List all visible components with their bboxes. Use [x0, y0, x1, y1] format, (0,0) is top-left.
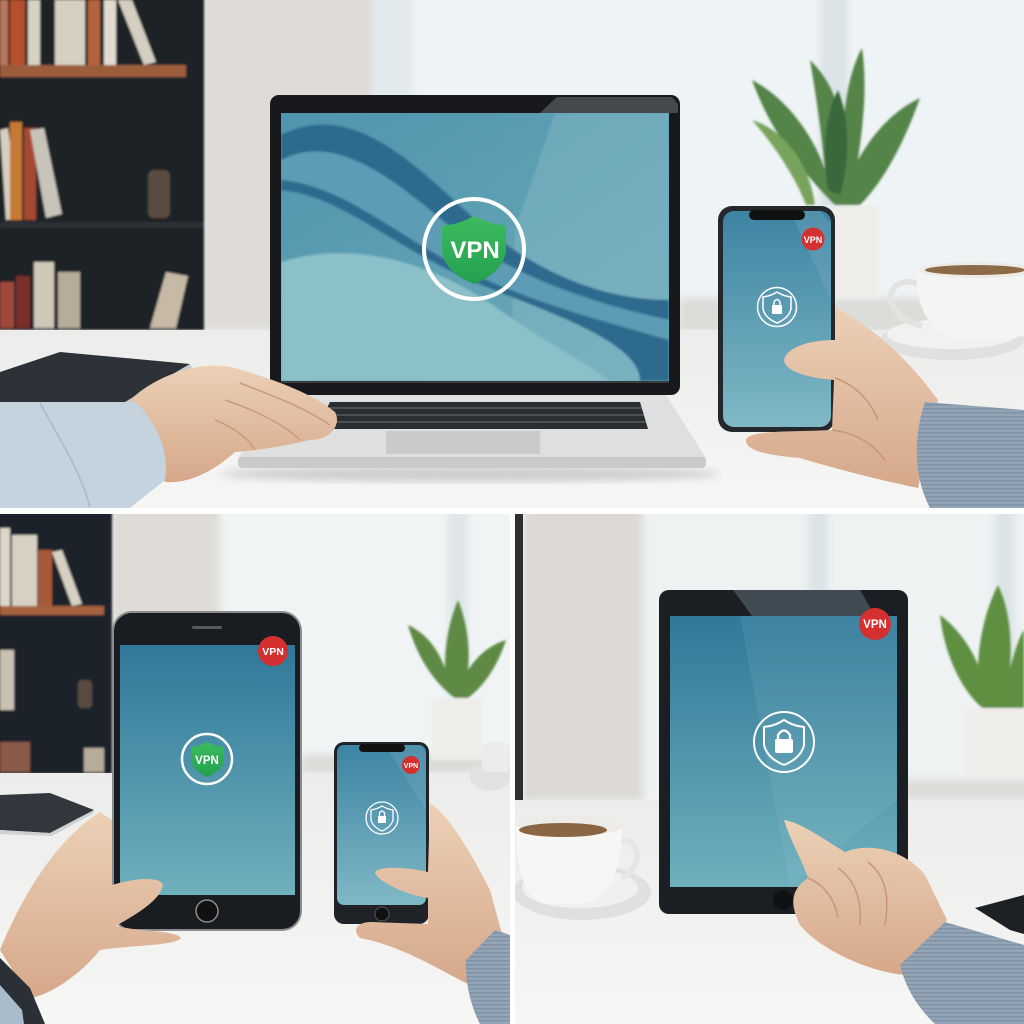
room background: [505, 504, 1024, 804]
lock icon: [758, 288, 796, 326]
pointing hand: [784, 820, 1024, 1024]
VPN badge: [182, 734, 232, 784]
desk: [0, 330, 1024, 508]
panel: bottom right tablet: [505, 504, 1024, 1024]
left hand on laptop: [0, 366, 337, 508]
VPN dot: VPN: [262, 646, 284, 658]
wall edge: [515, 514, 523, 802]
panel: top laptop and phone: [0, 0, 1024, 508]
lid: [270, 95, 680, 395]
plant: [940, 585, 1024, 774]
phone top: [718, 206, 835, 432]
VPN badge: VPN: [195, 755, 219, 767]
left hand: [0, 812, 181, 1024]
tablet: [659, 590, 908, 914]
bookshelf: [0, 509, 112, 774]
VPN dot: [859, 608, 891, 640]
VPN dot: [802, 228, 824, 250]
trackpad: [386, 431, 540, 454]
notebook: [0, 793, 94, 836]
laptop base: [238, 395, 706, 461]
screen: [281, 113, 669, 381]
VPN dot: [258, 636, 288, 666]
VPN badge on laptop: VPN: [450, 237, 500, 264]
plant: [408, 600, 506, 760]
lock icon: [366, 802, 398, 834]
VPN dot: [402, 756, 420, 774]
VPN dot: VPN: [863, 619, 887, 631]
laptop shadow: [220, 466, 720, 482]
coffee cup: [513, 816, 651, 920]
room background: [0, 0, 1024, 335]
bookshelf: [0, 0, 204, 330]
large phone: [112, 611, 302, 931]
coffee cup: [880, 262, 1024, 360]
VPN badge on laptop: [424, 199, 524, 299]
small phone: [334, 742, 429, 924]
VPN dot: VPN: [404, 763, 418, 770]
plant: [752, 48, 920, 298]
desk: [515, 800, 1024, 1024]
room background: [111, 514, 510, 773]
lock icon: [754, 712, 814, 772]
coffee cup: [470, 742, 510, 791]
panel: bottom left two phones: [0, 504, 520, 1024]
desk: [0, 773, 510, 1024]
VPN dot: VPN: [804, 235, 822, 245]
right hand holding phone: [746, 308, 1024, 508]
phone on desk: [975, 895, 1024, 934]
keyboard: [316, 402, 648, 429]
laptop: [238, 95, 706, 468]
right hand: [356, 804, 510, 1024]
notebook: [0, 352, 192, 402]
